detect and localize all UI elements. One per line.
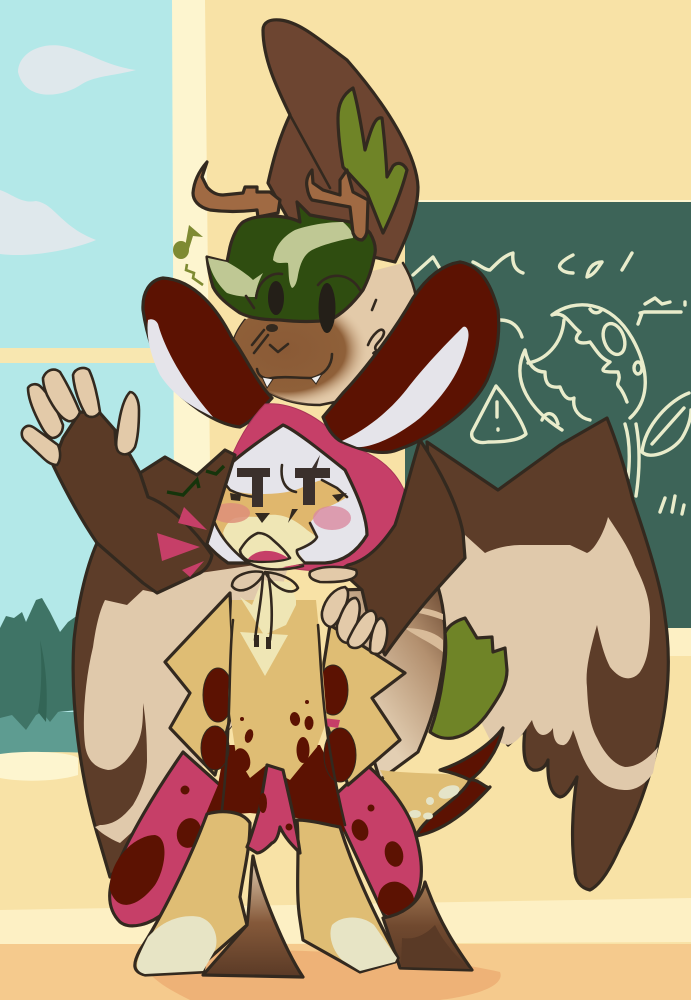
window frame bar bbox=[0, 348, 178, 363]
music note bbox=[173, 225, 203, 285]
cloud: lower bbox=[0, 190, 96, 255]
red cuffs bbox=[201, 665, 356, 782]
torso spots bbox=[231, 700, 314, 774]
small moth: dark skirt bbox=[205, 745, 345, 832]
face fur bbox=[210, 480, 347, 570]
big moth: left ear bbox=[143, 278, 272, 427]
big moth: left antler bbox=[193, 162, 280, 217]
nose bbox=[255, 513, 270, 523]
angry eyes bbox=[237, 468, 330, 507]
window frame post bbox=[172, 0, 210, 760]
big moth: hand on shoulder bbox=[309, 567, 387, 654]
small moth: left lower wing bbox=[110, 752, 232, 926]
blush left bbox=[212, 503, 250, 523]
blush right bbox=[313, 506, 351, 530]
left foot patch bbox=[137, 916, 216, 974]
chalk planet bbox=[552, 305, 645, 418]
big moth: waving hand fingers bbox=[22, 368, 139, 465]
small moth: right lower wing bbox=[330, 765, 421, 918]
face outline bbox=[233, 263, 417, 405]
chest arrows bbox=[240, 580, 296, 676]
big moth: right antler bbox=[307, 170, 368, 240]
green tail of big moth bbox=[430, 618, 507, 738]
tail spots bbox=[409, 783, 461, 820]
hair highlight left bbox=[208, 258, 263, 297]
small moth: tail bbox=[380, 728, 503, 838]
neck bow bbox=[232, 572, 298, 649]
hair fringe bbox=[222, 465, 347, 497]
big moth: waving arm bbox=[53, 412, 212, 593]
big moth: collar flap bbox=[140, 450, 235, 550]
cloud: upper bbox=[18, 45, 136, 95]
board rail bbox=[405, 200, 691, 202]
pine trees bbox=[0, 598, 78, 730]
chalk warning triangle bbox=[472, 386, 526, 443]
light patch below window bbox=[0, 752, 78, 781]
small moth: torso bbox=[222, 580, 345, 825]
brown blush bbox=[234, 314, 362, 404]
big moth: right wing bbox=[427, 418, 668, 890]
open mouth bbox=[240, 533, 290, 562]
big moth: face bbox=[234, 262, 416, 406]
small moth: hood bbox=[192, 404, 410, 571]
mouth bbox=[257, 354, 332, 379]
green tuft on ear bbox=[338, 88, 407, 233]
big moth: tall antenna ear bbox=[263, 20, 418, 262]
left wing beige field bbox=[84, 560, 290, 843]
small moth: hoof left bbox=[203, 856, 303, 977]
pink tie bbox=[323, 718, 340, 728]
face outline bbox=[210, 483, 317, 569]
hair highlight top bbox=[273, 222, 353, 288]
floor shadow bbox=[140, 950, 501, 1000]
small moth: coat sleeves bbox=[165, 593, 405, 785]
chalkboard bbox=[405, 202, 691, 628]
big moth: torso bbox=[340, 587, 445, 780]
big moth: right ear bbox=[323, 262, 499, 452]
window sky bbox=[0, 0, 176, 756]
torso stripes bbox=[402, 608, 443, 652]
eye left bbox=[268, 281, 284, 315]
small moth: left leg bbox=[135, 812, 250, 975]
chalk leaf bbox=[642, 393, 691, 455]
chalk tray bbox=[405, 628, 691, 656]
tree trunk shadow bbox=[38, 640, 47, 722]
big moth: right arm bbox=[340, 440, 465, 655]
collar green line bbox=[167, 466, 224, 495]
floor bbox=[0, 944, 691, 1000]
center pink wing bbox=[247, 765, 300, 853]
big moth: left wing bbox=[73, 480, 290, 877]
chalk doodles bbox=[413, 253, 691, 514]
wing beige field bbox=[437, 517, 658, 790]
small moth: right leg bbox=[297, 820, 398, 972]
nose and whiskers bbox=[252, 330, 288, 353]
right foot patch bbox=[330, 918, 397, 971]
angry marks bbox=[157, 507, 207, 577]
hair white bbox=[192, 425, 367, 563]
wall below window bbox=[0, 752, 178, 915]
muzzle bbox=[223, 515, 317, 570]
eye right bbox=[318, 283, 336, 333]
big moth: hair bbox=[207, 202, 375, 333]
tail spikes bbox=[416, 728, 503, 836]
small moth: hoof right bbox=[383, 882, 472, 970]
baseboard bbox=[0, 898, 691, 945]
outdoor ground bbox=[0, 712, 178, 758]
